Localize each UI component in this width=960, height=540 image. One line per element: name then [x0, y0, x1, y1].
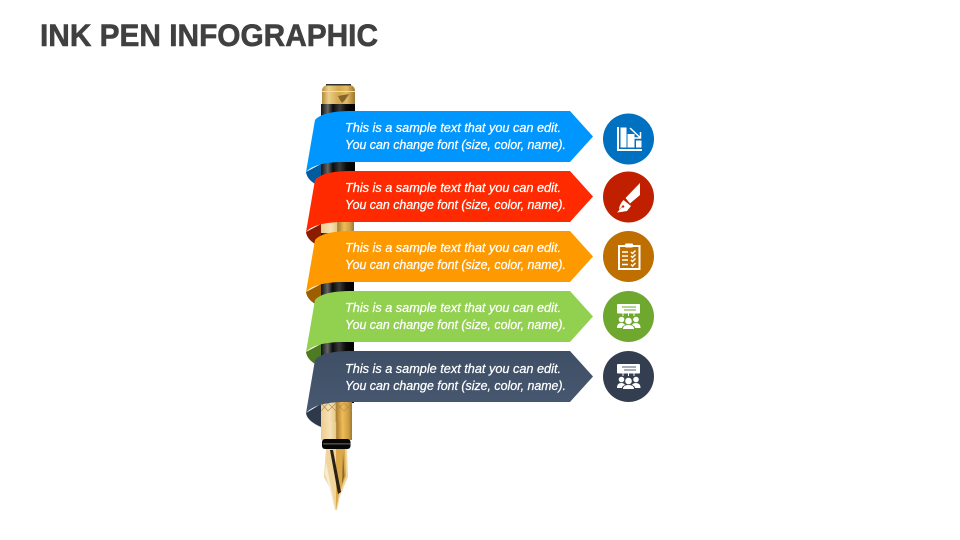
icon: bar chart circle — [603, 114, 654, 164]
pen middle gold band — [321, 222, 354, 233]
icon: clipboard checklist circle — [603, 231, 654, 282]
ribbon 3 — [306, 231, 593, 307]
ribbon text 2 — [345, 181, 566, 212]
ribbon 4 — [306, 291, 593, 367]
ribbon text 2: This is a sample text that you can edit. — [345, 181, 561, 195]
ribbon text 2: You can change font (size, color, name). — [345, 198, 566, 212]
ribbon text 1: This is a sample text that you can edit. — [345, 121, 561, 135]
ribbon text 1: You can change font (size, color, name). — [345, 138, 566, 152]
ribbon text 5: You can change font (size, color, name). — [345, 379, 566, 393]
ribbon 1 — [306, 111, 593, 187]
ribbon text 3 — [345, 241, 566, 272]
title: INK PEN INFOGRAPHIC — [40, 17, 378, 53]
ribbon text 5: This is a sample text that you can edit. — [345, 362, 561, 376]
pen nib — [324, 449, 348, 510]
pen cap top — [322, 84, 355, 104]
ribbon text 1 — [345, 121, 566, 152]
pen barrel — [321, 104, 355, 222]
ribbon 5 — [306, 351, 593, 427]
ribbon 2 — [306, 171, 593, 247]
icon: team presentation circle green — [603, 291, 654, 342]
ribbon text 4 — [345, 301, 566, 332]
pen rings — [322, 439, 350, 449]
ribbon text 4: This is a sample text that you can edit. — [345, 301, 561, 315]
ribbon text 4: You can change font (size, color, name). — [345, 318, 566, 332]
icon: team presentation circle navy — [603, 351, 654, 402]
ribbon text 3: This is a sample text that you can edit. — [345, 241, 561, 255]
icon: fountain pen nib circle — [603, 172, 654, 222]
pen grip section — [320, 402, 352, 440]
pen lower barrel — [321, 233, 354, 403]
ribbon text 3: You can change font (size, color, name). — [345, 258, 566, 272]
ribbon text 5 — [345, 362, 566, 393]
icon: ink pen illustration — [320, 84, 355, 510]
